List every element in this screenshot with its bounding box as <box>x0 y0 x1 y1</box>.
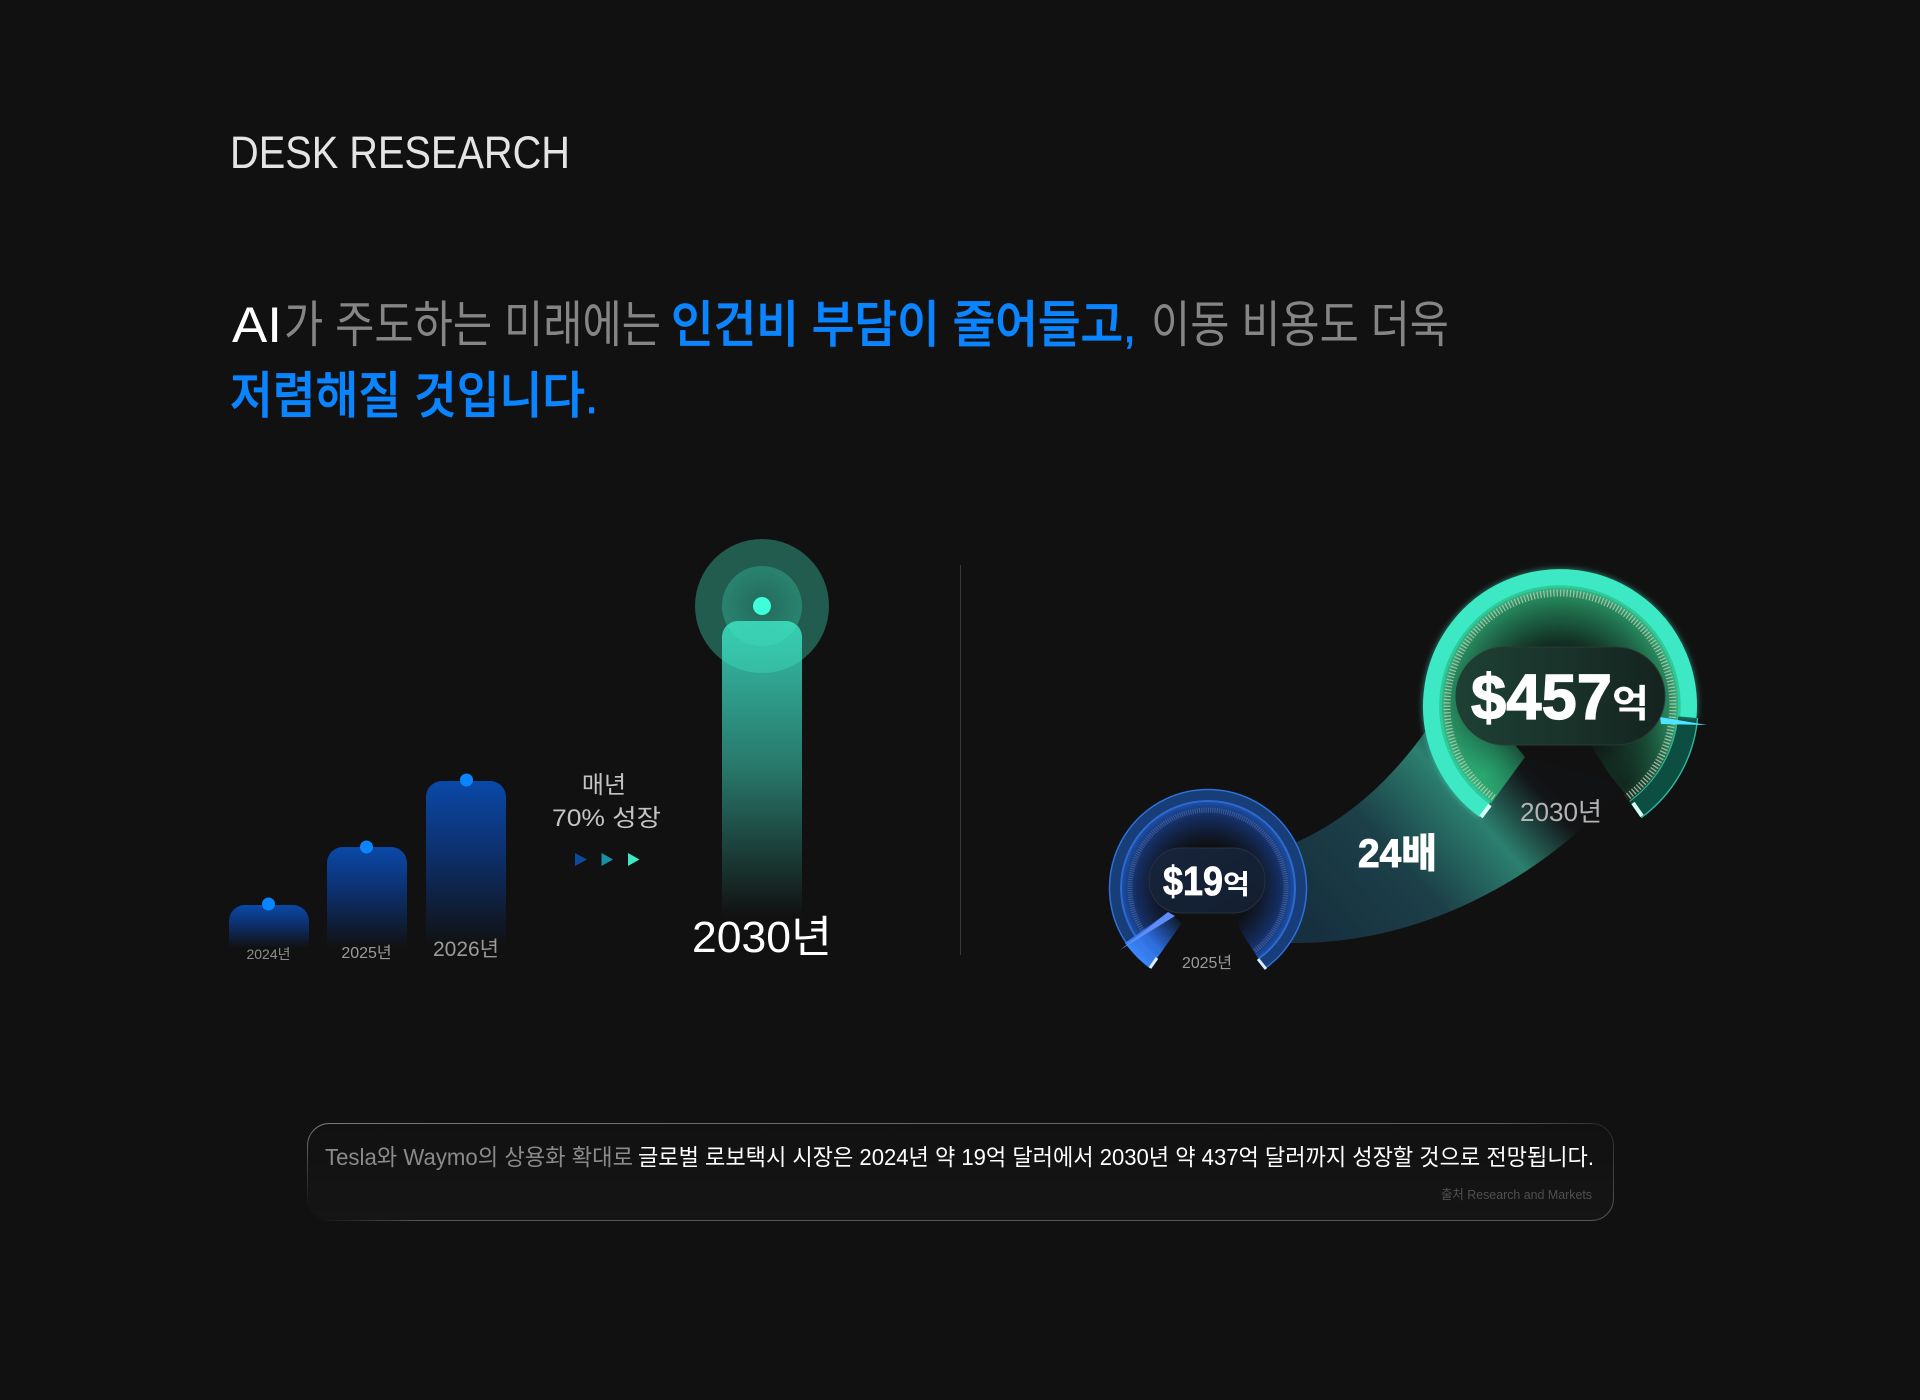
bar 2024: 2024년 <box>246 946 291 962</box>
callout box <box>308 1124 1614 1220</box>
large gauge 2030 <box>1418 565 1707 822</box>
small gauge 2025: 억 <box>1223 870 1250 900</box>
headline <box>230 297 1449 424</box>
needle <box>1120 912 1175 950</box>
bar 2024 <box>229 898 309 962</box>
panel: market size gauges <box>1110 578 1707 975</box>
large gauge 2030: 2030년 <box>1520 797 1602 827</box>
headline: AI <box>232 297 282 353</box>
growth swoosh <box>1262 725 1625 943</box>
bar 2025 <box>327 840 407 962</box>
value pill <box>1456 647 1665 745</box>
bar 2026 <box>426 774 506 961</box>
large gauge 2030: $457 <box>1471 661 1612 733</box>
growth callout <box>552 772 661 866</box>
headline: 인건비 부담이 줄어들고, <box>671 297 1136 353</box>
headline: 이동 비용도 더욱 <box>1151 297 1449 353</box>
dark tail <box>1635 717 1688 810</box>
eyebrow heading: DESK RESEARCH <box>230 127 570 178</box>
divider <box>960 565 962 955</box>
small gauge 2025: 2025년 <box>1182 954 1232 972</box>
large gauge 2030: 억 <box>1612 684 1649 726</box>
callout box: 글로벌 로보택시 시장은 2024년 약 19억 달러에서 2030년 약 437억 달러까지 성장할 것으로 전망됩니다. <box>638 1144 1594 1170</box>
value pill <box>1149 848 1265 913</box>
arrows <box>575 853 640 866</box>
bright wedge <box>1125 912 1182 968</box>
bar 2026: 2026년 <box>433 938 499 961</box>
end caps <box>1481 805 1490 817</box>
mint arc <box>1432 578 1688 810</box>
bar 2025: 2025년 <box>341 944 392 962</box>
headline: 가 주도하는 미래에는 <box>284 297 661 353</box>
growth callout: 매년 <box>582 772 626 799</box>
multiplier label: 24배 <box>1358 832 1437 876</box>
mint arc glow <box>1432 578 1688 810</box>
callout text: Tesla와 Waymo의 상용화 확대로 <box>325 1144 633 1170</box>
headline: 저렴해질 것입니다. <box>230 368 598 424</box>
end caps <box>1150 958 1157 968</box>
bar 2030: 2030년 <box>692 913 832 962</box>
bar 2030 <box>692 539 832 962</box>
small gauge 2025 <box>1110 790 1307 975</box>
source: 출처 Research and Markets <box>1441 1187 1592 1202</box>
growth callout: 70% 성장 <box>552 805 661 832</box>
small gauge 2025: $19 <box>1163 858 1223 904</box>
needle <box>1660 717 1707 725</box>
panel: yearly bar chart <box>229 539 832 962</box>
